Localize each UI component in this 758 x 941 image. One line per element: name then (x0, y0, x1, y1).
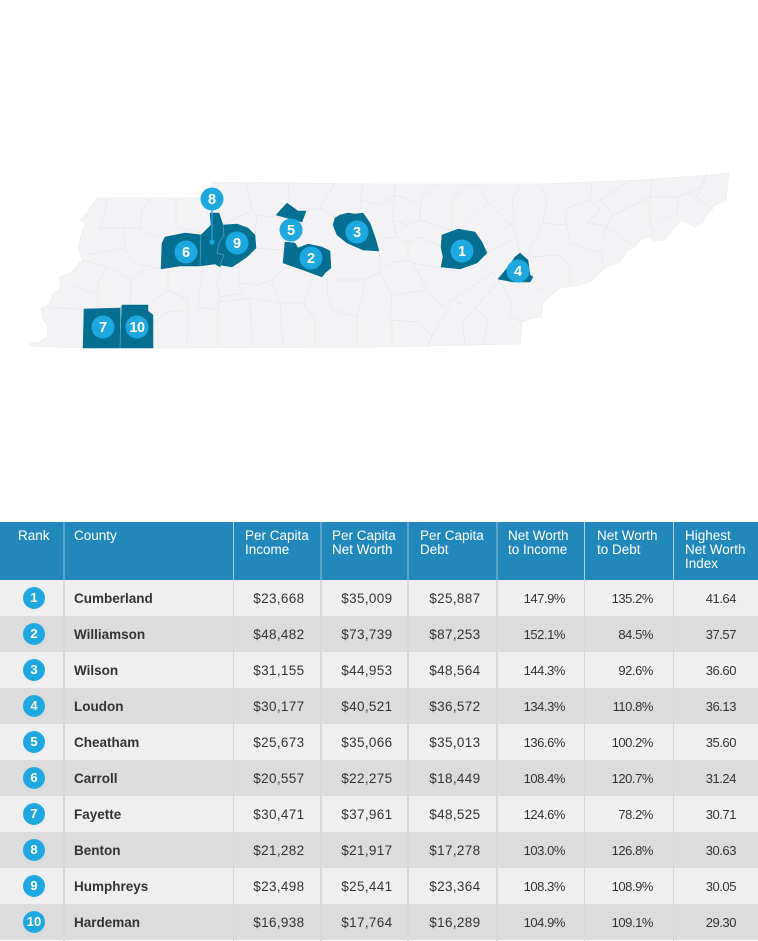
row 7: Fayette: Fayette (74, 807, 121, 822)
row 1: Cumberland: 135.2% (612, 591, 653, 606)
row 3: Wilson: $31,155 (253, 663, 304, 678)
pin 9: Humphreys: 9 (233, 236, 241, 252)
table header: County (74, 528, 117, 543)
row 5: Cheatham: 100.2% (612, 735, 653, 750)
row 3: Wilson: 3 (30, 662, 38, 677)
row 9: Humphreys: $25,441 (341, 879, 392, 894)
pin 3: Wilson (346, 220, 368, 244)
row 1: Cumberland: 41.64 (706, 591, 736, 606)
table header: Per Capita (245, 528, 309, 543)
row 6: Carroll: 31.24 (706, 771, 736, 786)
row 1: Cumberland: $25,887 (429, 591, 480, 606)
state outline (29, 173, 729, 348)
row 2: Williamson: 37.57 (706, 627, 736, 642)
row 8: Benton: 30.63 (706, 843, 736, 858)
pin 4: Loudon: 4 (514, 264, 522, 280)
pin 8: Benton: 8 (208, 192, 216, 208)
row 3: Wilson: 36.60 (706, 663, 736, 678)
table header: Net Worth (508, 528, 569, 543)
row 2: Williamson: 152.1% (524, 627, 565, 642)
pin 2: Williamson (300, 246, 322, 270)
table header: Net Worth (685, 542, 746, 557)
row 6: Carroll: 120.7% (612, 771, 653, 786)
table header: Index (685, 556, 718, 571)
row 4: Loudon (0, 688, 758, 724)
row 4: Loudon: 110.8% (613, 699, 653, 714)
row 8: Benton: $17,278 (429, 843, 480, 858)
row 6: Carroll: Carroll (74, 771, 118, 786)
row 5: Cheatham: 35.60 (706, 735, 736, 750)
table header: to Income (508, 542, 567, 557)
row 1: Cumberland: $23,668 (253, 591, 304, 606)
county: Benton (200, 213, 224, 267)
row 1: Cumberland: Cumberland (74, 591, 153, 606)
table header: Per Capita (420, 528, 484, 543)
row 10: Hardeman: $16,289 (429, 915, 480, 930)
row 1: Cumberland: 147.9% (524, 591, 565, 606)
row 3: Wilson: $48,564 (429, 663, 480, 678)
county: Wilson (333, 213, 379, 251)
pin 7: Fayette (92, 316, 114, 338)
pin 3: Wilson: 3 (353, 225, 361, 241)
row 7: Fayette: $30,471 (253, 807, 304, 822)
map: Tennessee counties (28, 172, 730, 348)
row 5: Cheatham (0, 724, 758, 760)
row 4: Loudon: Loudon (74, 699, 123, 714)
row 3: Wilson: 144.3% (524, 663, 565, 678)
row 9: Humphreys: 108.9% (612, 879, 653, 894)
row 8: Benton: 126.8% (612, 843, 653, 858)
row 2: Williamson: 84.5% (618, 627, 653, 642)
county: Carroll (161, 233, 202, 269)
county: Loudon (498, 253, 533, 282)
row 2: Williamson: $48,482 (253, 627, 304, 642)
pin 9: Humphreys (226, 232, 248, 254)
pin 10: Hardeman (126, 316, 148, 338)
row 3: Wilson (0, 652, 758, 688)
row 7: Fayette (0, 796, 758, 832)
table header: Net Worth (332, 542, 393, 557)
row 8: Benton: 103.0% (524, 843, 565, 858)
row 4: Loudon: $40,521 (341, 699, 392, 714)
table header: to Debt (597, 542, 641, 557)
row 5: Cheatham: $35,066 (341, 735, 392, 750)
row 3: Wilson: $44,953 (341, 663, 392, 678)
row 10: Hardeman (0, 904, 758, 940)
row 5: Cheatham: 5 (30, 734, 38, 749)
row 10: Hardeman: 29.30 (706, 915, 736, 930)
row 6: Carroll: $20,557 (253, 771, 304, 786)
ranking table (0, 522, 758, 941)
county: Williamson (283, 242, 331, 277)
row 9: Humphreys (0, 868, 758, 904)
pin 6: Carroll: 6 (182, 245, 190, 261)
row 4: Loudon: $30,177 (253, 699, 304, 714)
row 5: Cheatham: $35,013 (429, 735, 480, 750)
inner county borders (120, 225, 224, 348)
row 4: Loudon: 36.13 (706, 699, 736, 714)
county: Humphreys (217, 224, 256, 267)
row 5: Cheatham: $25,673 (253, 735, 304, 750)
row 1: Cumberland: 1 (30, 590, 38, 605)
row 5: Cheatham: 136.6% (524, 735, 565, 750)
table header (0, 522, 758, 580)
row 2: Williamson: 2 (30, 626, 38, 641)
row 5: Cheatham: Cheatham (74, 735, 139, 750)
table header: Income (245, 542, 289, 557)
county boundaries (50, 173, 713, 347)
row 2: Williamson: $87,253 (429, 627, 480, 642)
row 6: Carroll (0, 760, 758, 796)
table header: Per Capita (332, 528, 396, 543)
county: Cheatham (276, 203, 306, 222)
row 6: Carroll: 6 (30, 770, 38, 785)
row 2: Williamson (0, 616, 758, 652)
row 10: Hardeman: Hardeman (74, 915, 140, 930)
row 1: Cumberland: $35,009 (341, 591, 392, 606)
row 8: Benton: $21,282 (253, 843, 304, 858)
table header: Highest (685, 528, 731, 543)
county: Hardeman (120, 305, 153, 348)
row 6: Carroll: 108.4% (524, 771, 565, 786)
row 4: Loudon: 134.3% (524, 699, 565, 714)
row 10: Hardeman: 10 (27, 914, 41, 929)
row 10: Hardeman: 104.9% (524, 915, 565, 930)
pin 5: Cheatham: 5 (287, 223, 295, 239)
row 10: Hardeman: 109.1% (612, 915, 653, 930)
row 7: Fayette: 7 (30, 806, 38, 821)
row 8: Benton (0, 832, 758, 868)
pin 2: Williamson: 2 (307, 251, 315, 267)
pin 6: Carroll (174, 240, 198, 264)
row 8: Benton: 8 (30, 842, 38, 857)
table header: Rank (18, 528, 50, 543)
row 2: Williamson: Williamson (74, 627, 145, 642)
row 9: Humphreys: Humphreys (74, 879, 148, 894)
county: Cumberland (441, 229, 487, 269)
row 10: Hardeman: $17,764 (341, 915, 392, 930)
row 7: Fayette: $48,525 (429, 807, 480, 822)
highlighted counties (83, 203, 533, 348)
row 1: Cumberland (0, 580, 758, 616)
row 7: Fayette: 30.71 (706, 807, 736, 822)
row 8: Benton: Benton (74, 843, 120, 858)
row 3: Wilson: Wilson (74, 663, 118, 678)
pin 8: Benton (200, 188, 224, 245)
row 6: Carroll: $18,449 (429, 771, 480, 786)
row 2: Williamson: $73,739 (341, 627, 392, 642)
row 9: Humphreys: 30.05 (706, 879, 736, 894)
pin 5: Cheatham (280, 218, 302, 242)
row 7: Fayette: 78.2% (618, 807, 653, 822)
row 7: Fayette: $37,961 (341, 807, 392, 822)
row 9: Humphreys: 9 (30, 878, 38, 893)
row 7: Fayette: 124.6% (524, 807, 565, 822)
row 10: Hardeman: $16,938 (253, 915, 304, 930)
row 3: Wilson: 92.6% (618, 663, 653, 678)
table header: Net Worth (597, 528, 658, 543)
pin 1: Cumberland (450, 240, 474, 262)
row 9: Humphreys: $23,498 (253, 879, 304, 894)
pin 7: Fayette: 7 (99, 320, 107, 336)
county: Fayette (83, 308, 120, 348)
row 6: Carroll: $22,275 (341, 771, 392, 786)
row 9: Humphreys: 108.3% (524, 879, 565, 894)
row 4: Loudon: 4 (30, 698, 38, 713)
row 4: Loudon: $36,572 (429, 699, 480, 714)
pin 1: Cumberland: 1 (458, 244, 466, 260)
pin 10: Hardeman: 10 (129, 320, 145, 336)
row 9: Humphreys: $23,364 (429, 879, 480, 894)
table header: Debt (420, 542, 449, 557)
pin 4: Loudon (506, 260, 530, 282)
row 8: Benton: $21,917 (341, 843, 392, 858)
